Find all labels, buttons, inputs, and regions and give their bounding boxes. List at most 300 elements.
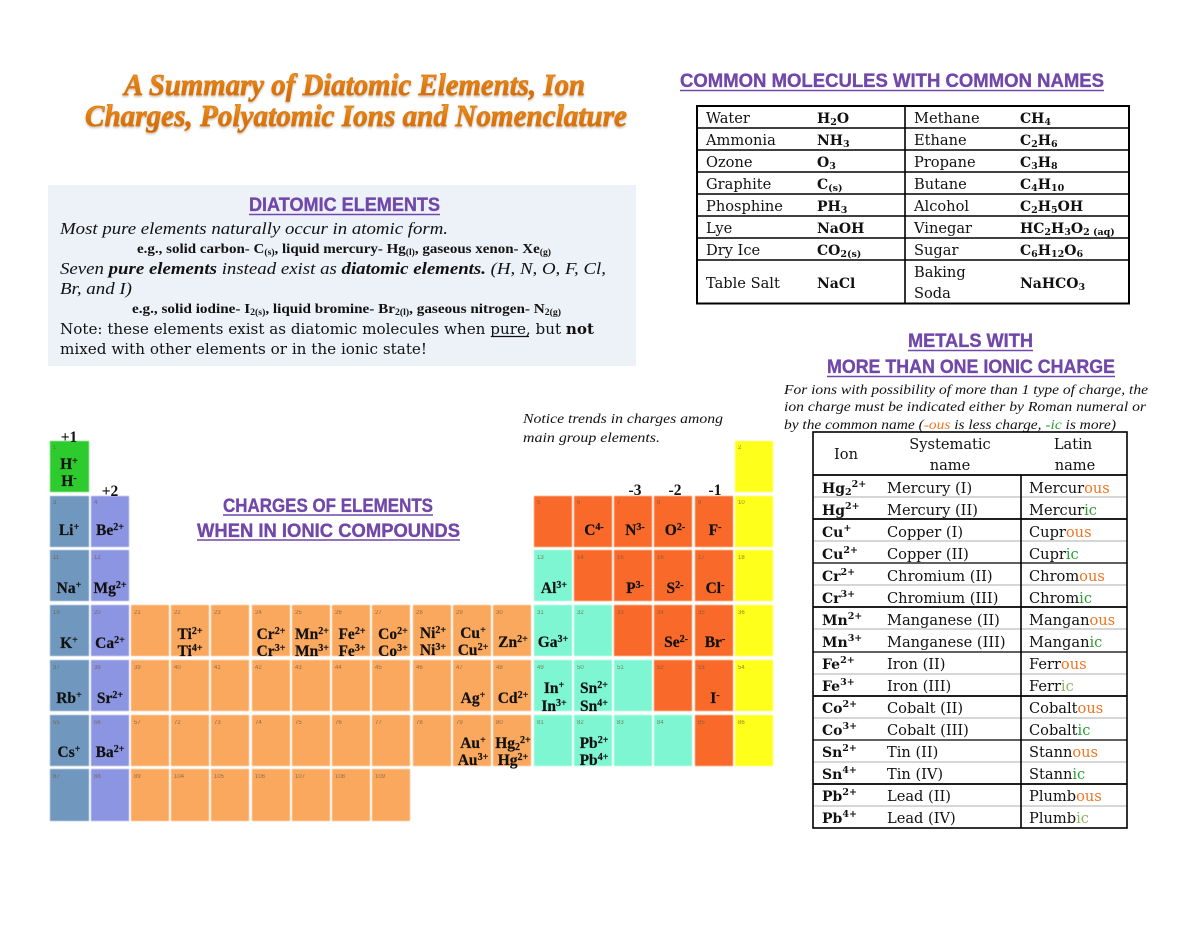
text: diatomic examples: 2(s) xyxy=(250,307,265,317)
ion symbols in periodic table: Pb xyxy=(580,735,598,752)
ion symbols in periodic table: 2+ xyxy=(112,690,123,701)
ion symbols in periodic table: + xyxy=(480,625,486,636)
atomic numbers: 10 xyxy=(738,500,745,506)
text: trends note xyxy=(522,412,723,446)
table: metal ions: Cr xyxy=(822,569,841,585)
atomic numbers: 74 xyxy=(255,720,262,726)
atomic numbers: 81 xyxy=(537,720,544,726)
ion symbols in periodic table: + xyxy=(558,680,564,691)
text: diatomic examples: 2(g) xyxy=(545,307,561,317)
atomic numbers: 52 xyxy=(657,665,664,671)
table: common molecules: 2 (aq) xyxy=(1083,227,1115,238)
ion symbols in periodic table: + xyxy=(76,580,82,591)
table: metal ions: + xyxy=(843,523,851,534)
ion symbols in periodic table: 2+ xyxy=(113,522,124,533)
atomic numbers: 89 xyxy=(134,774,141,780)
table: metal ions: Chromic xyxy=(1029,590,1092,607)
ion symbols in periodic table: Al xyxy=(541,580,556,597)
table: metal ions: Ferric xyxy=(1029,678,1074,695)
table: common molecules: 6 xyxy=(1051,139,1058,150)
text: diatomic examples: , liquid bromine- Br xyxy=(265,302,395,317)
table: common molecules: (s) xyxy=(828,183,842,194)
table: metal ions: Mercury (II) xyxy=(887,502,978,519)
table: metal ions: Iron (III) xyxy=(887,678,951,695)
atomic numbers: 27 xyxy=(375,610,382,616)
ion symbols in periodic table: 2+ xyxy=(517,634,528,645)
table: metal ions: Mercurous xyxy=(1029,480,1110,497)
text: ion naming explanation xyxy=(783,383,1148,433)
text: ion naming explanation: by the common name ( -ous is less charge, -ic is more) xyxy=(784,418,1116,433)
ion symbols in periodic table: 3+ xyxy=(556,580,567,591)
table: common molecules: NH xyxy=(817,133,843,149)
ion symbols in periodic table: Hg xyxy=(495,735,515,752)
ion symbols in periodic table: - xyxy=(718,522,721,533)
text: atomic examples: e.g., solid carbon- C xyxy=(137,242,256,257)
table: common molecules: Table Salt xyxy=(706,275,780,292)
atomic numbers: 82 xyxy=(577,720,584,726)
table: metal ions: 4+ xyxy=(842,765,857,776)
atomic numbers: 54 xyxy=(738,665,745,671)
table: common molecules: Ethane xyxy=(914,132,967,149)
table: metal ions: 2+ xyxy=(843,545,858,556)
ion symbols in periodic table: 3+ xyxy=(556,698,567,709)
ion symbols in periodic table: 2+ xyxy=(478,642,489,653)
ion symbols in periodic table: + xyxy=(75,744,81,755)
atomic numbers: 8 xyxy=(657,500,661,506)
atomic numbers: 76 xyxy=(335,720,342,726)
atomic numbers: 44 xyxy=(335,665,342,671)
table: common molecules: C xyxy=(1020,133,1031,149)
atomic numbers: 53 xyxy=(698,665,705,671)
ion symbols in periodic table: Hg xyxy=(498,752,518,769)
table: common molecules: H xyxy=(1051,221,1064,237)
table: common molecules: 3 xyxy=(1031,161,1038,172)
ion symbols in periodic table: 4- xyxy=(595,522,604,533)
table: metal ions: name xyxy=(930,457,970,474)
table: common molecules: Graphite xyxy=(706,176,771,193)
atomic numbers xyxy=(53,445,745,780)
table: common molecules: Propane xyxy=(914,154,976,171)
table: metal ions: Cobaltous xyxy=(1029,700,1103,717)
atomic numbers: 80 xyxy=(496,720,503,726)
heading: charges of elements: CHARGES OF ELEMENTS xyxy=(223,495,433,517)
atomic numbers: 12 xyxy=(94,555,101,561)
atomic numbers: 31 xyxy=(537,610,544,616)
hydrogen cell xyxy=(50,441,89,492)
table: metal ions: Cobalt (III) xyxy=(887,722,969,739)
table: common molecules: 2 xyxy=(1031,139,1038,150)
table: metal ions: 2+ xyxy=(852,479,866,490)
table: metal ions: Systematic xyxy=(909,436,991,453)
table: metal ions: Mn xyxy=(822,635,848,651)
table: metal ions: Tin (II) xyxy=(887,744,938,761)
ion symbols in periodic table: H xyxy=(60,456,72,473)
table: common molecules: O xyxy=(1071,221,1083,237)
table: metal ions: 4+ xyxy=(842,809,857,820)
atomic numbers: 86 xyxy=(738,720,745,726)
atomic numbers: 88 xyxy=(94,774,101,780)
ion symbols in periodic table: 2+ xyxy=(397,626,408,637)
table: common molecules: Soda xyxy=(914,285,951,302)
table: metal ions: Cu xyxy=(822,525,843,541)
table: common molecules: PH xyxy=(817,199,841,215)
atomic numbers: 84 xyxy=(657,720,664,726)
ion symbols in periodic table: 3+ xyxy=(435,642,446,653)
noble gas cells xyxy=(735,441,773,766)
table: metal ions: Stannic xyxy=(1029,766,1085,783)
table: common molecules: O xyxy=(837,111,849,127)
atomic numbers: 19 xyxy=(53,610,60,616)
atomic numbers: 83 xyxy=(617,720,624,726)
group charge labels: +2 xyxy=(102,483,119,500)
ion symbols in periodic table: Fe xyxy=(338,643,355,660)
ion symbols in periodic table: 3+ xyxy=(275,643,286,654)
atomic numbers: 57 xyxy=(134,720,141,726)
table: common molecules: 4 xyxy=(1031,183,1038,194)
atomic numbers: 20 xyxy=(94,610,101,616)
table: common molecules: C xyxy=(1020,177,1031,193)
text: atomic examples: (s) xyxy=(264,247,275,257)
ion symbols in periodic table: 3+ xyxy=(355,643,366,654)
heading: charges of elements xyxy=(197,495,460,542)
table: common molecules: CO xyxy=(817,243,840,259)
ion symbols in periodic table: 2+ xyxy=(598,735,609,746)
table: metal ions: Co xyxy=(822,701,842,717)
table: metal ions: 3+ xyxy=(842,721,857,732)
table: metal ions: Lead (II) xyxy=(887,788,951,805)
table: common molecules: 3 xyxy=(841,205,847,216)
table: common molecules: Phosphine xyxy=(706,198,783,215)
atomic numbers: 41 xyxy=(214,665,221,671)
ion symbols in periodic table: K xyxy=(60,635,72,652)
ion symbols in periodic table: Ni xyxy=(420,625,435,642)
table: metal ions xyxy=(813,432,1127,828)
atomic numbers: 108 xyxy=(335,774,346,780)
ion symbols in periodic table: Cu xyxy=(458,642,478,659)
table: common molecules: 5 xyxy=(1051,205,1058,216)
table: metal ions: 2+ xyxy=(841,567,855,578)
ion symbols in periodic table: In xyxy=(544,680,558,697)
text: diatomic examples: e.g., solid iodine- I xyxy=(132,302,241,317)
table: metal ions: Ferrous xyxy=(1029,656,1087,673)
atomic numbers: 16 xyxy=(657,555,664,561)
table: common molecules: H xyxy=(1038,177,1051,193)
table: common molecules: Lye xyxy=(706,220,732,237)
table: common molecules: H xyxy=(1038,133,1051,149)
ion symbols in periodic table: + xyxy=(73,522,79,533)
ion symbols in periodic table: H xyxy=(61,473,73,490)
table: common molecules: C xyxy=(1020,155,1031,171)
atomic numbers: 43 xyxy=(295,665,302,671)
text: atomic examples: , liquid mercury- Hg xyxy=(275,242,406,257)
atomic numbers: 35 xyxy=(698,610,705,616)
table: common molecules: 2 xyxy=(1031,205,1038,216)
ion symbols in periodic table: 2+ xyxy=(355,626,366,637)
ion symbols in periodic table: 3+ xyxy=(318,643,329,654)
group 2 cells xyxy=(91,496,129,821)
atomic numbers: 38 xyxy=(94,665,101,671)
table: metal ions: Copper (I) xyxy=(887,524,963,541)
ion symbols in periodic table: 2+ xyxy=(114,635,125,646)
ion symbols in periodic table: O xyxy=(665,522,677,539)
atomic numbers: 55 xyxy=(53,720,60,726)
atomic numbers: 17 xyxy=(698,555,705,561)
ion symbols in periodic table xyxy=(56,456,725,769)
heading: metals with more than one ionic charge: MORE THAN ONE IONIC CHARGE xyxy=(827,356,1115,378)
metal p-block cells xyxy=(534,550,692,766)
ion symbols in periodic table: Au xyxy=(460,735,480,752)
table: metal ions: Co xyxy=(822,723,842,739)
ion symbols in periodic table: 2 xyxy=(515,742,520,753)
ion symbols in periodic table: Ga xyxy=(538,634,558,651)
table: common molecules: 2(s) xyxy=(840,249,861,260)
table: common molecules: OH xyxy=(1058,199,1083,215)
table: metal ions: Manganous xyxy=(1029,612,1115,629)
table: metal ions: 3+ xyxy=(848,633,862,644)
table: metal ions: Cu xyxy=(822,547,843,563)
table: metal ions: Plumbic xyxy=(1029,810,1089,827)
table: metal ions: Sn xyxy=(822,745,842,761)
ion symbols in periodic table: Cd xyxy=(498,690,518,707)
ion symbols in periodic table: Mg xyxy=(93,580,116,597)
atomic numbers: 107 xyxy=(295,774,306,780)
table: common molecules: 3 xyxy=(1064,227,1071,238)
table: metal ions: Latin xyxy=(1054,436,1092,453)
table: metal ions: Lead (IV) xyxy=(887,810,956,827)
table: metal ions: Tin (IV) xyxy=(887,766,943,783)
heading: diatomic elements: DIATOMIC ELEMENTS xyxy=(249,194,440,216)
table: common molecules: 2 xyxy=(1044,227,1051,238)
ion symbols in periodic table: - xyxy=(721,580,724,591)
table: metal ions: 3+ xyxy=(841,589,855,600)
ion symbols in periodic table: - xyxy=(73,473,77,484)
ion symbols in periodic table: 2- xyxy=(677,522,685,533)
table: metal ions: Sn xyxy=(822,767,842,783)
table: metal ions: Plumbous xyxy=(1029,788,1102,805)
ion symbols in periodic table: Cl xyxy=(706,580,721,597)
text: note: mixed with other elements or in the ionic state! xyxy=(60,340,427,358)
atomic numbers: 24 xyxy=(255,610,262,616)
atomic numbers: 28 xyxy=(416,610,423,616)
ion symbols in periodic table: Cs xyxy=(58,744,75,761)
table: metal ions: Ion xyxy=(834,446,858,463)
text: atomic examples: (l) xyxy=(406,247,415,257)
atomic numbers: 2 xyxy=(738,445,742,451)
ion symbols in periodic table: + xyxy=(72,456,78,467)
heading: metals with more than one ionic charge: METALS WITH xyxy=(908,330,1033,352)
title xyxy=(85,67,627,133)
ion symbols in periodic table: - xyxy=(722,634,725,645)
heading: metals with more than one ionic charge xyxy=(827,330,1115,378)
table: metal ions: Cobalt (II) xyxy=(887,700,963,717)
atomic numbers: 40 xyxy=(174,665,181,671)
ion symbols in periodic table: Sr xyxy=(97,690,112,707)
ion symbols in periodic table: 3+ xyxy=(397,643,408,654)
table: metal ions: name xyxy=(1055,457,1095,474)
table: metal ions: Manganese (II) xyxy=(887,612,1000,629)
table: common molecules xyxy=(697,106,1129,304)
table: common molecules: C xyxy=(1020,199,1031,215)
ion symbols in periodic table: Ni xyxy=(420,642,435,659)
table: metal ions: Copper (II) xyxy=(887,546,969,563)
table: common molecules: 8 xyxy=(1051,161,1058,172)
atomic numbers: 4 xyxy=(94,500,98,506)
table: common molecules: 3 xyxy=(843,139,850,150)
table: metal ions: Cr xyxy=(822,591,841,607)
ion symbols in periodic table: Rb xyxy=(56,690,76,707)
atomic numbers: 37 xyxy=(53,665,60,671)
table: common molecules: Baking xyxy=(914,264,966,281)
atomic numbers: 49 xyxy=(537,665,544,671)
text: atomic examples: , gaseous xenon- Xe xyxy=(415,242,540,257)
atomic numbers: 3 xyxy=(53,500,57,506)
table: metal ions: 2+ xyxy=(840,655,855,666)
ion symbols in periodic table: 3+ xyxy=(558,634,569,645)
atomic numbers: 48 xyxy=(496,665,503,671)
ion symbols in periodic table: 2+ xyxy=(192,626,203,637)
atomic numbers: 104 xyxy=(174,774,185,780)
ion symbols in periodic table: 4+ xyxy=(192,643,203,654)
atomic numbers: 6 xyxy=(577,500,581,506)
table: common molecules: Ozone xyxy=(706,154,752,171)
ion symbols in periodic table: 2+ xyxy=(520,735,531,746)
atomic numbers: 47 xyxy=(456,665,463,671)
ion symbols in periodic table: In xyxy=(541,698,556,715)
atomic numbers: 25 xyxy=(295,610,302,616)
atomic numbers: 79 xyxy=(456,720,463,726)
table: common molecules: H xyxy=(817,111,830,127)
transition metal cells xyxy=(131,605,531,821)
atomic numbers: 22 xyxy=(174,610,181,616)
table: metal ions: 2+ xyxy=(845,501,860,512)
ion symbols in periodic table: 3- xyxy=(636,580,644,591)
ion symbols in periodic table: 2+ xyxy=(318,626,329,637)
nonmetal cells xyxy=(534,496,733,766)
title: Charges, Polyatomic Ions and Nomenclature xyxy=(85,98,627,133)
ion symbols in periodic table: 4+ xyxy=(598,752,609,763)
table: common molecules: O xyxy=(1064,243,1076,259)
table: metal ions: Mercury (I) xyxy=(887,480,972,497)
ion symbols in periodic table: Na xyxy=(57,580,76,597)
group charge labels: -1 xyxy=(709,482,721,499)
ion symbols in periodic table: + xyxy=(480,690,486,701)
atomic numbers: 50 xyxy=(577,665,584,671)
table: common molecules: NaHCO xyxy=(1020,276,1078,292)
atomic numbers: 105 xyxy=(214,774,225,780)
ion symbols in periodic table: Fe xyxy=(338,626,355,643)
atomic numbers: 78 xyxy=(416,720,423,726)
ion symbols in periodic table: Ag xyxy=(461,690,480,707)
group charge labels: +1 xyxy=(61,429,77,446)
ion symbols in periodic table: Mn xyxy=(295,626,318,643)
table: common molecules: NaCl xyxy=(817,276,855,292)
ion symbols in periodic table: Se xyxy=(664,634,680,651)
ion symbols in periodic table: Mn xyxy=(295,643,318,660)
atomic numbers: 15 xyxy=(617,555,624,561)
table: common molecules: Ammonia xyxy=(705,132,776,149)
table: metal ions: 2+ xyxy=(848,611,862,622)
ion symbols in periodic table: S xyxy=(667,580,675,597)
atomic numbers: 106 xyxy=(255,774,266,780)
ion symbols in periodic table: Au xyxy=(458,752,478,769)
table: common molecules: HC xyxy=(1020,221,1044,237)
table: metal ions: Cupric xyxy=(1029,546,1079,563)
table: common molecules: Vinegar xyxy=(913,220,972,237)
text: ion naming explanation: ion charge must be indicated either by Roman numeral or xyxy=(784,400,1147,415)
table: metal ions: Mn xyxy=(822,613,848,629)
ion symbols in periodic table: P xyxy=(626,580,636,597)
text: trends note: main group elements. xyxy=(523,431,660,446)
ion symbols in periodic table: Ca xyxy=(95,635,114,652)
text: trends note: Notice trends in charges among xyxy=(522,412,723,427)
table: common molecules: Sugar xyxy=(914,242,958,259)
table: common molecules: 3 xyxy=(1078,282,1085,293)
atomic numbers: 75 xyxy=(295,720,302,726)
table: common molecules: Methane xyxy=(914,110,980,127)
text: diatomic examples: , gaseous nitrogen- N xyxy=(409,302,545,317)
table: common molecules: NaOH xyxy=(817,221,864,237)
ion symbols in periodic table: I xyxy=(710,690,716,707)
atomic numbers: 32 xyxy=(577,610,584,616)
ion symbols in periodic table: 2+ xyxy=(435,625,446,636)
text: atomic examples: (g) xyxy=(540,247,551,257)
ion symbols in periodic table: 4+ xyxy=(597,698,608,709)
text: diatomic list continued: Br, and I) xyxy=(60,279,132,298)
panel: diatomic elements xyxy=(48,185,636,366)
text: note: Note: these elements exist as diatomic molecules when pure, but not xyxy=(60,320,594,338)
ion symbols in periodic table: Co xyxy=(378,626,397,643)
atomic numbers: 72 xyxy=(174,720,181,726)
ion symbols in periodic table: 2+ xyxy=(518,690,529,701)
group charge labels: -3 xyxy=(629,482,642,499)
ion symbols in periodic table: + xyxy=(72,635,78,646)
ion symbols in periodic table: Co xyxy=(378,643,397,660)
atomic numbers: 45 xyxy=(375,665,382,671)
ion symbols in periodic table: C xyxy=(584,522,595,539)
ion symbols in periodic table: F xyxy=(709,522,718,539)
atomic numbers: 56 xyxy=(94,720,101,726)
group 1 cells xyxy=(50,496,89,821)
table: metal ions: Chromium (II) xyxy=(887,568,993,585)
ion symbols in periodic table: 2- xyxy=(680,634,688,645)
atomic numbers: 46 xyxy=(416,665,423,671)
atomic numbers: 33 xyxy=(617,610,624,616)
ion symbols in periodic table: 2+ xyxy=(114,744,125,755)
table: metal ions: Chromous xyxy=(1029,568,1105,585)
table: common molecules: H xyxy=(1038,199,1051,215)
ion symbols in periodic table: Ti xyxy=(177,626,192,643)
text: diatomic statement: Seven pure elements instead exist as diatomic elements. (H, N, O, F, Cl, xyxy=(60,259,606,278)
atomic numbers: 5 xyxy=(537,500,541,506)
table: metal ions: Pb xyxy=(822,811,842,827)
text: note xyxy=(60,320,594,358)
title: A Summary of Diatomic Elements, Ion xyxy=(122,67,585,102)
table: metal ions: 2 xyxy=(845,487,852,498)
text: ion naming explanation: For ions with possibility of more than 1 type of charge, the xyxy=(783,383,1148,398)
atomic numbers: 23 xyxy=(214,610,221,616)
table: common molecules: Alcohol xyxy=(913,198,969,215)
ion symbols in periodic table: Br xyxy=(705,634,722,651)
periodic table cells xyxy=(50,441,773,821)
atomic numbers: 34 xyxy=(657,610,664,616)
ion symbols in periodic table: Cu xyxy=(460,625,480,642)
group charge labels xyxy=(61,429,721,500)
ion symbols in periodic table: + xyxy=(480,735,486,746)
table: metal ions: Cobaltic xyxy=(1029,722,1090,739)
table: metal ions: Cuprous xyxy=(1029,524,1092,541)
table: common molecules: H xyxy=(1038,155,1051,171)
ion symbols in periodic table: 2+ xyxy=(116,580,127,591)
